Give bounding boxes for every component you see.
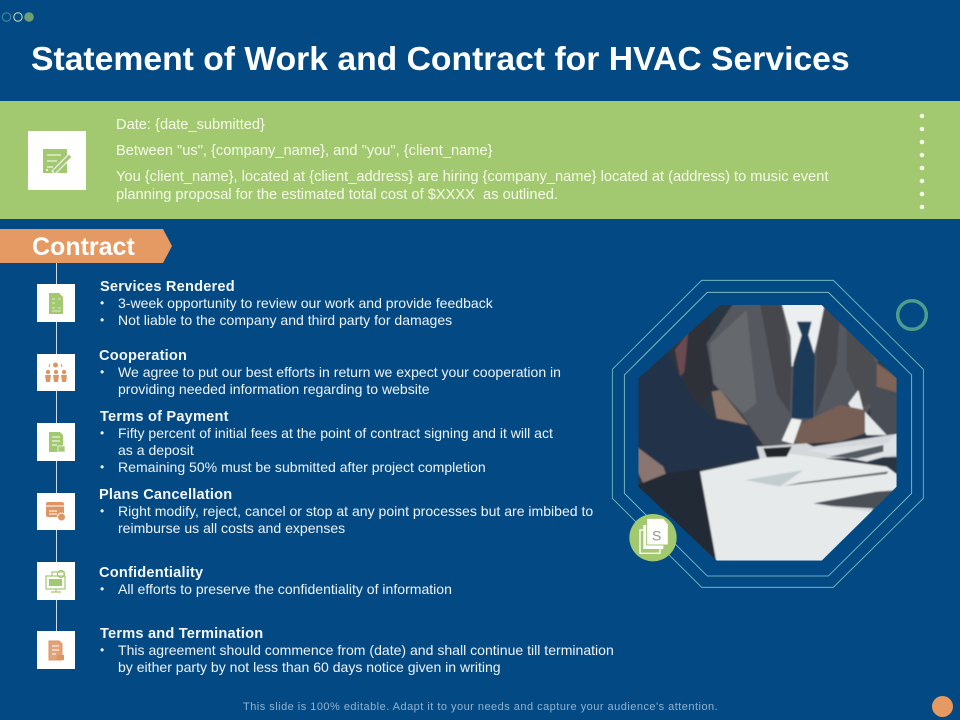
heading: Terms and Termination bbox=[100, 626, 263, 642]
item: terms of payment bbox=[37, 409, 553, 475]
item: confidentiality bbox=[37, 562, 452, 600]
text: description bbox=[116, 169, 828, 203]
timeline line bbox=[56, 263, 57, 631]
text: parties: Between "us", {company_name}, and "you", {client_name} bbox=[116, 143, 492, 159]
text: description: planning proposal for the estimated total cost of $XXXX as outlined. bbox=[116, 187, 558, 203]
text: This agreement should commence from (date) and shall continue till termination bbox=[118, 642, 614, 658]
icon: team bbox=[37, 354, 75, 391]
icon: card bbox=[37, 493, 75, 530]
item: cooperation bbox=[37, 348, 561, 397]
heading: Plans Cancellation bbox=[99, 487, 232, 503]
item: services rendered bbox=[37, 279, 493, 328]
text: description: You {client_name}, located at {client_address} are hiring {company_name} located at (address) to music event bbox=[116, 169, 828, 185]
heading: Services Rendered bbox=[100, 279, 235, 295]
icon: dollar documents badge: S bbox=[652, 528, 661, 544]
heading: Cooperation bbox=[99, 348, 187, 364]
text: All efforts to preserve the confidentiality of information bbox=[118, 581, 452, 597]
text: We agree to put our best efforts in return we expect your cooperation in bbox=[118, 364, 561, 380]
photo panel: octagon frames and meeting photo bbox=[612, 280, 924, 588]
bullets: • bbox=[100, 504, 104, 518]
bullets: • bbox=[100, 296, 104, 310]
decorative ring bbox=[896, 299, 928, 331]
title: Statement of Work and Contract for HVAC Services bbox=[31, 40, 850, 78]
footer orange dot bbox=[932, 696, 953, 717]
dots column bbox=[920, 114, 924, 210]
icon: dollar documents badge bbox=[629, 514, 677, 561]
text: Fifty percent of initial fees at the point of contract signing and it will act bbox=[118, 425, 553, 441]
bullets: • bbox=[100, 582, 104, 596]
icon: document and pen bbox=[28, 131, 86, 190]
text: • bbox=[100, 460, 104, 474]
item: terms and termination bbox=[37, 626, 614, 675]
heading: Terms of Payment bbox=[100, 409, 229, 425]
icon: services document bbox=[37, 284, 75, 322]
text: Right modify, reject, cancel or stop at any point processes but are imbibed to bbox=[118, 503, 593, 519]
text: • bbox=[100, 313, 104, 327]
panel: intro band bbox=[0, 101, 960, 219]
item: plans cancellation bbox=[37, 487, 593, 536]
footer note: This slide is 100% editable. Adapt it to your needs and capture your audience's attention. bbox=[243, 701, 718, 713]
decorative circles bbox=[2, 12, 34, 22]
bullets: • bbox=[100, 426, 104, 440]
meeting photo bbox=[633, 300, 900, 567]
text: Remaining 50% must be submitted after project completion bbox=[118, 459, 486, 475]
text: Not liable to the company and third party for damages bbox=[118, 312, 452, 328]
heading: Contract arrow: Contract bbox=[32, 233, 135, 261]
bullets: • bbox=[100, 365, 104, 379]
text: by either party by not less than 60 days notice given in writing bbox=[118, 659, 501, 675]
text: reimburse us all costs and expenses bbox=[118, 520, 345, 536]
text: as a deposit bbox=[118, 442, 194, 458]
icon: monitor bbox=[37, 562, 75, 600]
heading: Contract arrow bbox=[0, 229, 172, 263]
heading: Confidentiality bbox=[99, 565, 203, 581]
icon: termination document bbox=[37, 631, 75, 669]
bullets: • bbox=[100, 643, 104, 657]
text: 3-week opportunity to review our work and provide feedback bbox=[118, 295, 493, 311]
text: date: Date: {date_submitted} bbox=[116, 117, 265, 133]
text: providing needed information regarding to website bbox=[118, 381, 430, 397]
icon: payment document bbox=[37, 423, 75, 461]
